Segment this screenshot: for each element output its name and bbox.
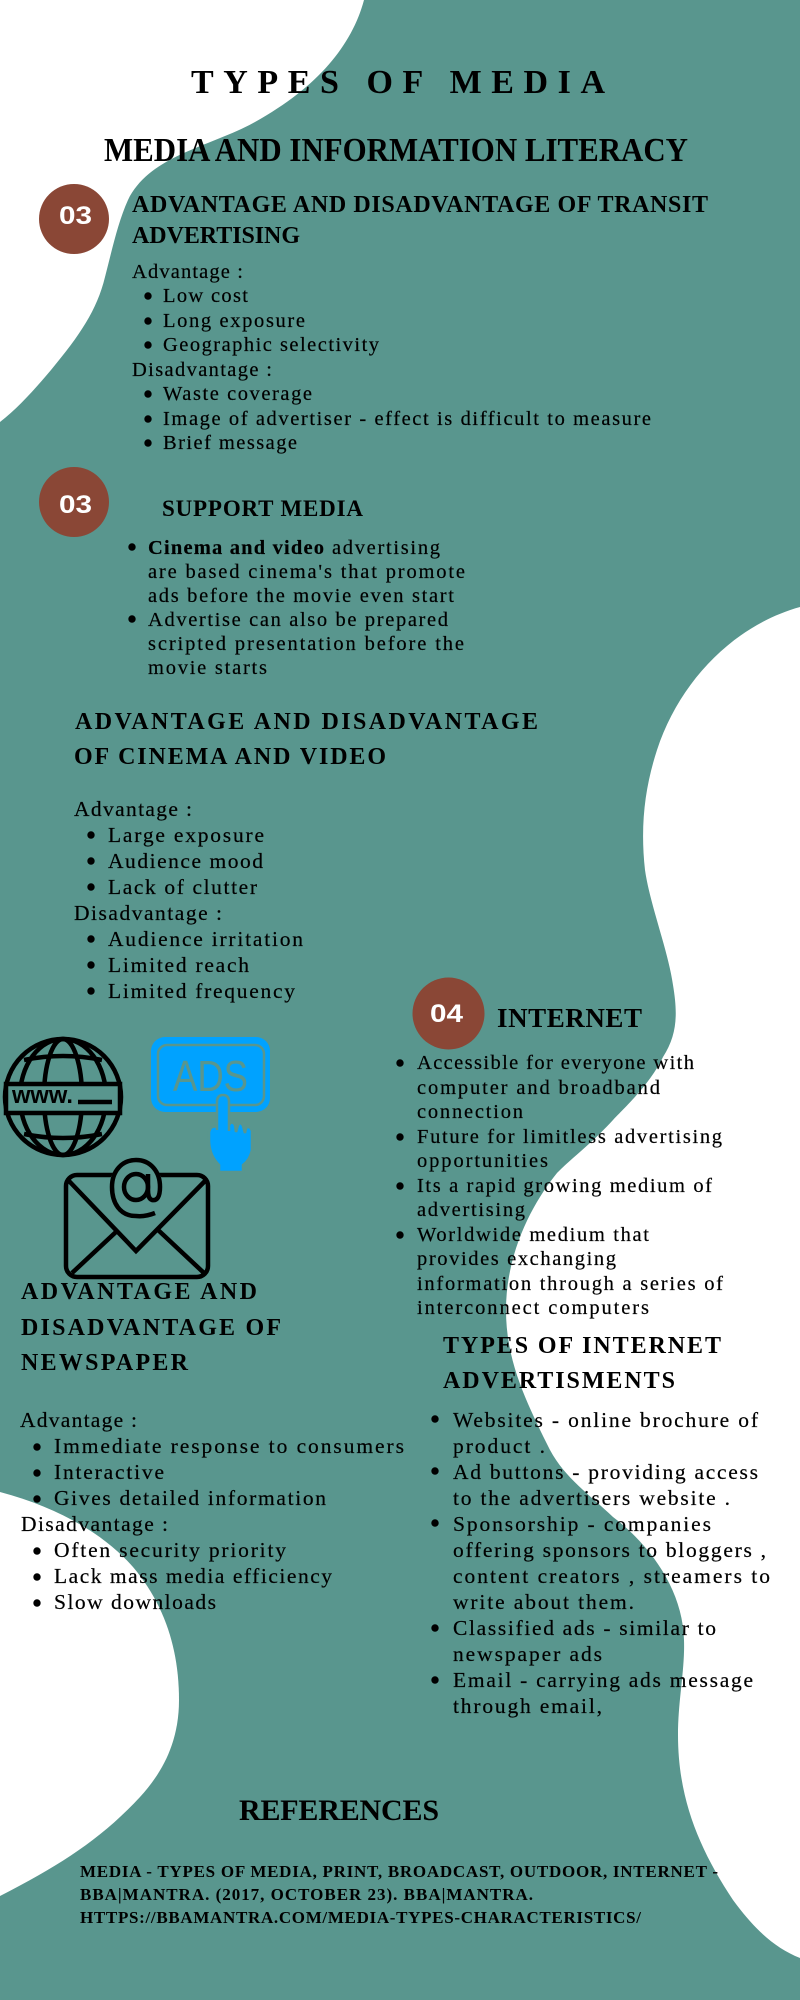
list: internet: interconnect computers [417, 1297, 649, 1319]
list: transit advantages and disadvantages: Image of advertiser - effect is difficult to measure [163, 408, 651, 430]
list: internet: computer and broadband [417, 1077, 660, 1099]
list: internet ad types: Ad buttons - providing access [453, 1460, 758, 1484]
list: newspaper advantages and disadvantages: Immediate response to consumers [54, 1434, 404, 1458]
list: transit advantages and disadvantages: Brief message [163, 432, 297, 454]
white blob: bottom left [0, 1492, 179, 1896]
list: transit advantages and disadvantages: Waste coverage [163, 383, 312, 405]
panel: support media [39, 467, 465, 679]
heading: transit advertising: ADVANTAGE AND DISADVANTAGE OF TRANSIT [132, 192, 708, 218]
list: cinema advantages and disadvantages [74, 797, 303, 1003]
list: internet: Worldwide medium that [417, 1224, 649, 1246]
citation text [80, 1862, 718, 1927]
list: transit advantages and disadvantages: Geographic selectivity [163, 334, 380, 356]
heading: cinema and video: ADVANTAGE AND DISADVANTAGE [75, 709, 538, 735]
icon: email envelope [66, 1160, 208, 1277]
list: internet ad types: through email, [453, 1694, 602, 1718]
white blob: right [506, 607, 800, 1958]
heading: cinema and video: OF CINEMA AND VIDEO [74, 744, 386, 770]
icon: ads button with hand [151, 1037, 270, 1172]
citation text: BBA|MANTRA. (2017, OCTOBER 23). BBA|MANTRA. [80, 1885, 533, 1904]
icon: ads button with hand: ADS [173, 1052, 248, 1101]
list: internet [396, 1052, 723, 1319]
heading: newspaper [21, 1279, 281, 1376]
panel: internet [396, 978, 723, 1319]
list: newspaper advantages and disadvantages [20, 1408, 404, 1614]
list: internet: opportunities [417, 1150, 548, 1172]
panel: newspaper [20, 1279, 404, 1614]
list: internet ad types: Sponsorship - companies [453, 1512, 711, 1536]
list: internet: advertising [417, 1199, 525, 1221]
list: internet ad types: write about them. [453, 1590, 634, 1614]
heading: support media: SUPPORT MEDIA [162, 496, 363, 521]
badge 04 [412, 978, 484, 1050]
list: support media: advertising [332, 537, 440, 559]
list: cinema advantages and disadvantages: Limited reach [108, 953, 249, 977]
list: newspaper advantages and disadvantages: Gives detailed information [54, 1486, 326, 1510]
list: support media: Cinema and video [148, 537, 324, 559]
list: internet: provides exchanging [417, 1248, 616, 1270]
badge 03: 03 [59, 491, 92, 519]
heading: references: REFERENCES [239, 1794, 439, 1827]
citation text: MEDIA - TYPES OF MEDIA, PRINT, BROADCAST, OUTDOOR, INTERNET - [80, 1862, 718, 1881]
heading: transit advertising [132, 192, 708, 249]
list: newspaper advantages and disadvantages: Advantage : [20, 1408, 137, 1432]
heading: types of internet advertisments [443, 1333, 721, 1394]
list: transit advantages and disadvantages: Low cost [163, 285, 248, 307]
list: support media: Advertise can also be prepared [148, 609, 448, 631]
list: internet: Accessible for everyone with [417, 1052, 694, 1074]
list: newspaper advantages and disadvantages: Disadvantage : [21, 1512, 168, 1536]
heading: newspaper: NEWSPAPER [21, 1350, 189, 1376]
heading: newspaper: DISADVANTAGE OF [21, 1315, 281, 1341]
list: support media: ads before the movie even start [148, 585, 454, 607]
badge 04: 04 [430, 1000, 463, 1028]
list: internet ad types: product . [453, 1434, 545, 1458]
list: transit advantages and disadvantages: Long exposure [163, 310, 305, 332]
list: cinema advantages and disadvantages: Lack of clutter [108, 875, 257, 899]
heading: cinema and video [74, 709, 538, 770]
panel: cinema and video [74, 709, 538, 1003]
panel: types of internet advertisments [431, 1333, 770, 1718]
list: internet ad types: content creators , streamers to [453, 1564, 770, 1588]
list: internet ad types: Websites - online brochure of [453, 1408, 759, 1432]
list: cinema advantages and disadvantages: Disadvantage : [74, 901, 222, 925]
badge 03 [39, 467, 109, 537]
list: internet ad types [431, 1408, 770, 1718]
subtitle: MEDIA AND INFORMATION LITERACY [104, 132, 688, 169]
heading: newspaper: ADVANTAGE AND [21, 1279, 257, 1305]
list: support media: scripted presentation before the [148, 633, 464, 655]
white blob: top left [0, 0, 364, 422]
list: transit advantages and disadvantages: Disadvantage : [132, 359, 272, 381]
badge 03: 03 [59, 202, 92, 230]
list: newspaper advantages and disadvantages: Lack mass media efficiency [54, 1564, 332, 1588]
list: newspaper advantages and disadvantages: Interactive [54, 1460, 164, 1484]
list: internet ad types: Email - carrying ads message [453, 1668, 753, 1692]
list: cinema advantages and disadvantages: Limited frequency [108, 979, 295, 1003]
heading: types of internet advertisments: TYPES OF INTERNET [443, 1333, 721, 1359]
list: transit advantages and disadvantages: Advantage : [132, 261, 243, 283]
list: internet: Its a rapid growing medium of [417, 1175, 712, 1197]
list: support media: movie starts [148, 657, 267, 679]
panel: references [80, 1794, 718, 1927]
heading: types of internet advertisments: ADVERTISMENTS [443, 1368, 675, 1394]
list: internet: information through a series of [417, 1273, 723, 1295]
list: newspaper advantages and disadvantages: Slow downloads [54, 1590, 216, 1614]
icon: www globe [5, 1039, 121, 1155]
title: TYPES OF MEDIA [191, 64, 605, 101]
list: internet: Future for limitless advertising [417, 1126, 722, 1148]
panel: transit advertising [39, 184, 708, 454]
list: cinema advantages and disadvantages: Large exposure [108, 823, 264, 847]
list: cinema advantages and disadvantages: Audience irritation [108, 927, 303, 951]
list: support media [128, 537, 465, 679]
list: newspaper advantages and disadvantages: Often security priority [54, 1538, 286, 1562]
list: cinema advantages and disadvantages: Advantage : [74, 797, 192, 821]
citation text: HTTPS://BBAMANTRA.COM/MEDIA-TYPES-CHARACTERISTICS/ [80, 1908, 641, 1927]
heading: transit advertising: ADVERTISING [132, 223, 300, 249]
list: internet ad types: to the advertisers website . [453, 1486, 730, 1510]
list: cinema advantages and disadvantages: Audience mood [108, 849, 263, 873]
list: internet ad types: Classified ads - similar to [453, 1616, 716, 1640]
list: internet ad types: newspaper ads [453, 1642, 602, 1666]
badge 03 [39, 184, 109, 254]
list: internet ad types: offering sponsors to bloggers , [453, 1538, 766, 1562]
list: internet: connection [417, 1101, 523, 1123]
list: support media: are based cinema's that promote [148, 561, 465, 583]
heading: internet: INTERNET [497, 1003, 642, 1033]
list: transit advantages and disadvantages [132, 261, 651, 454]
icon: www globe: www. [11, 1082, 73, 1109]
